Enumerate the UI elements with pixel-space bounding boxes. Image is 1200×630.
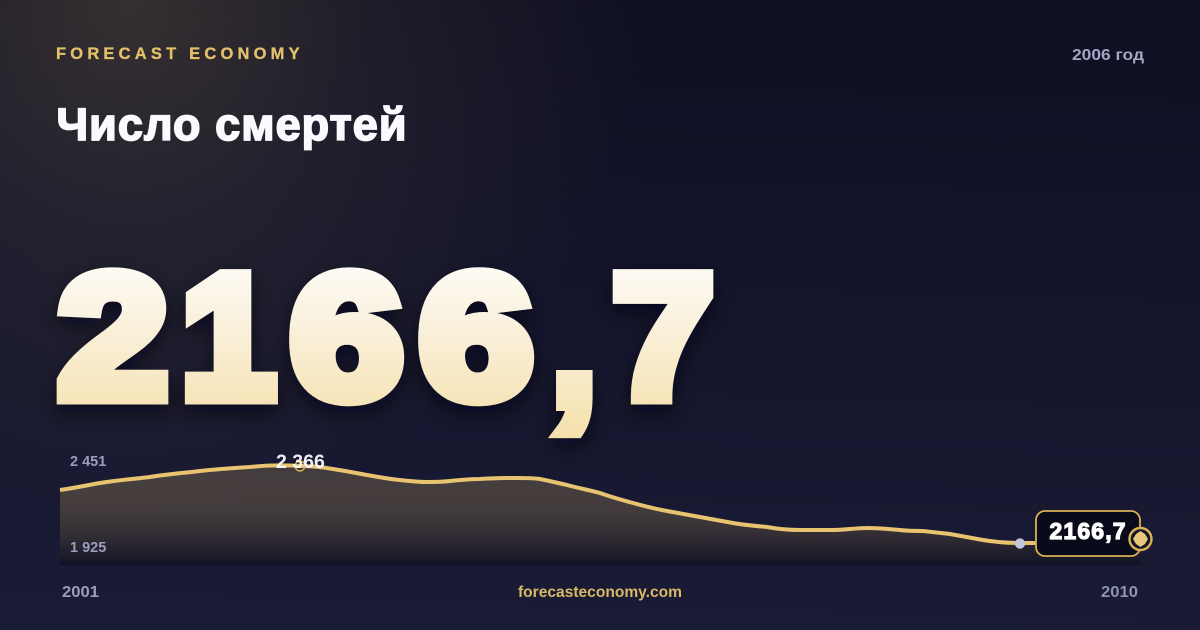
main value [58, 239, 714, 441]
peak value: 2 366 [276, 451, 325, 473]
area chart [60, 451, 1152, 565]
main value: 1 [182, 239, 275, 435]
title: Число смертей [56, 99, 406, 150]
end year: 2010 [1101, 584, 1138, 601]
start year: 2001 [62, 584, 99, 601]
current point marker [1130, 528, 1152, 550]
main value: 7 [613, 239, 714, 434]
previous point marker [1015, 538, 1025, 549]
main value: , [552, 245, 596, 441]
year label: 2006 год [1072, 47, 1144, 64]
main value: 6 [290, 240, 403, 435]
main value: 6 [419, 239, 533, 435]
current value callout [1036, 511, 1140, 556]
peak marker [295, 461, 305, 471]
axis max: 2 451 [70, 454, 106, 470]
brand label: FORECAST ECONOMY [56, 45, 304, 63]
source url: forecasteconomy.com [518, 584, 682, 601]
current value callout: 2166,7 [1050, 518, 1126, 544]
axis min: 1 925 [70, 540, 106, 556]
chart line [60, 465, 1040, 543]
chart area fill [60, 465, 1141, 565]
main value: 2 [58, 239, 168, 435]
